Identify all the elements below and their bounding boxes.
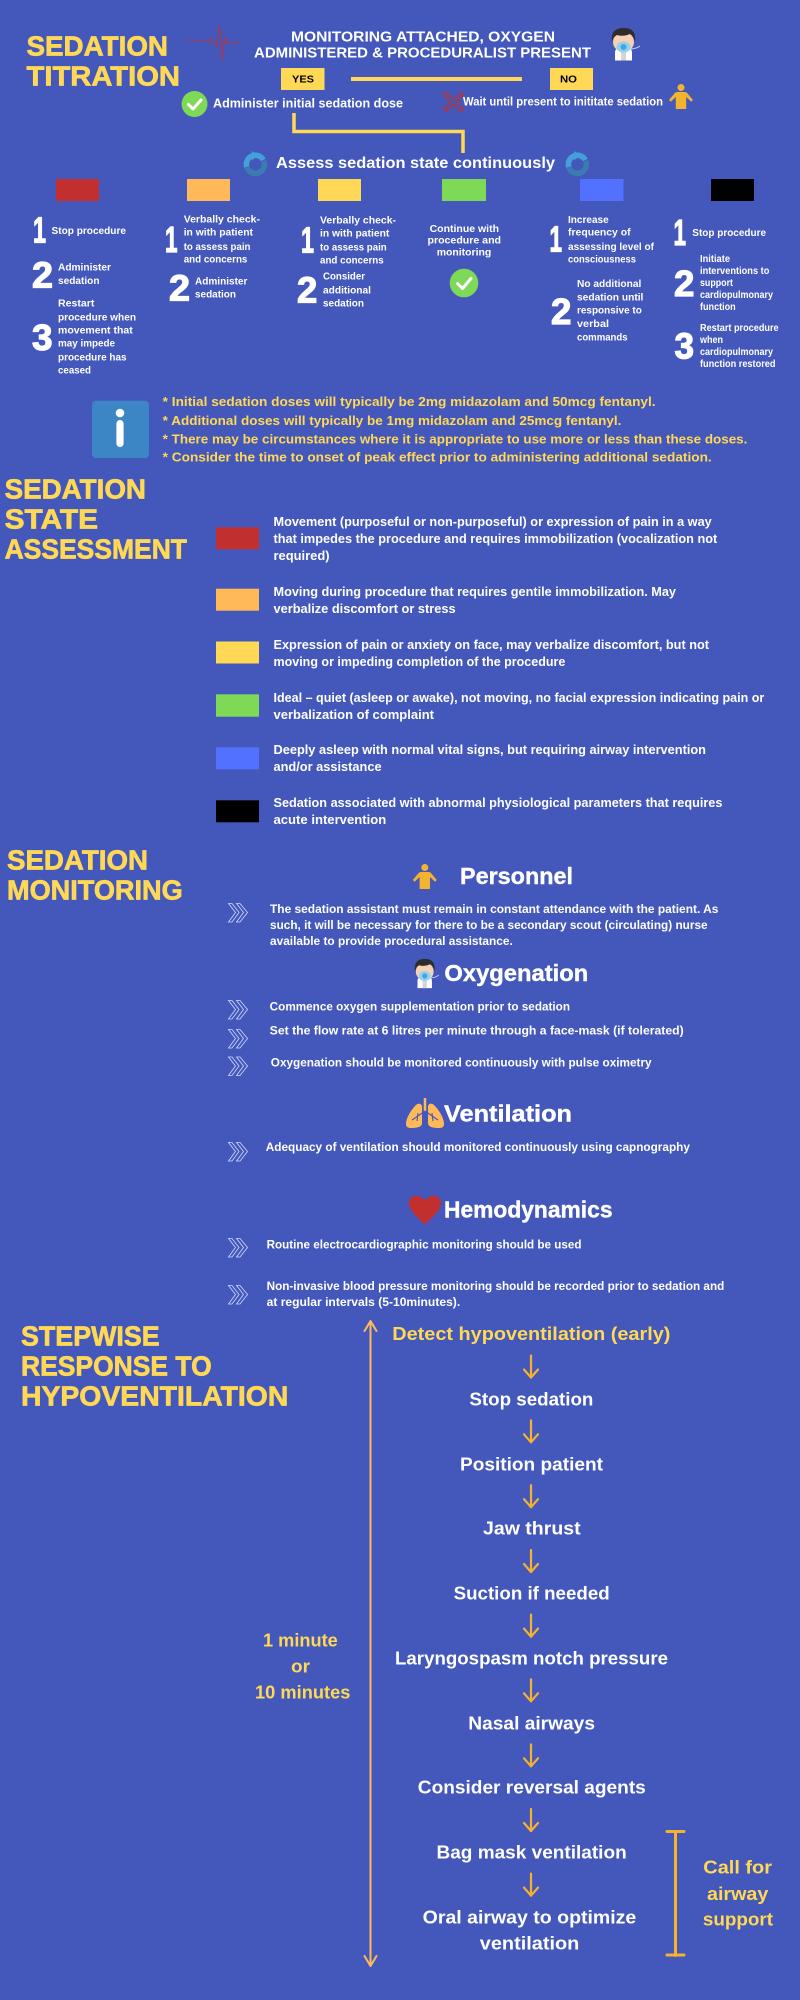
column: green: Continue with (430, 223, 499, 235)
connector: yes to no (351, 77, 522, 81)
column: orange: 1 (165, 219, 178, 260)
column: orange: 2 (169, 268, 190, 309)
state: green: Ideal – quiet (asleep or awake), not moving, no facial expression indicating pain or (274, 691, 764, 705)
step: reversal agents: Consider reversal agents (418, 1778, 646, 1798)
column: blue: frequency of (568, 227, 631, 239)
column: black (674, 179, 779, 370)
column: blue: verbal (577, 318, 609, 330)
icon: green check (182, 91, 208, 117)
text: wait until present: Wait until present to inititate sedation (463, 96, 663, 108)
column: red: Administer (58, 262, 111, 274)
column: yellow: Verbally check- (320, 214, 396, 226)
column: blue: assessing level of (568, 241, 654, 253)
text: administer initial dose: Administer initial sedation dose (213, 96, 403, 110)
heading: sedation monitoring: MONITORING (7, 874, 183, 905)
column: yellow: in with patient (320, 228, 390, 240)
column: red: sedation (58, 275, 100, 287)
arrow (524, 1550, 538, 1572)
column: blue: 2 (551, 291, 571, 332)
hemodynamics block: at regular intervals (5-10minutes). (267, 1297, 460, 1309)
column: black: support (700, 277, 733, 289)
column: black: Restart procedure (700, 322, 779, 334)
column: yellow: to assess pain (320, 242, 387, 254)
arrow (524, 1485, 538, 1507)
step: bag mask: Bag mask ventilation (436, 1843, 627, 1863)
heading: stepwise response (21, 1321, 288, 1412)
text: assess sedation state: Assess sedation state continuously (276, 155, 555, 172)
hemodynamics block (228, 1196, 724, 1309)
notes: doses: * Consider the time to onset of peak effect prior to administering additional sedation. (163, 449, 712, 464)
personnel block: such, it will be necessary for there to be a secondary scout (circulating) nurse (270, 920, 708, 932)
heading: stepwise response: STEPWISE (21, 1321, 160, 1352)
step: suction: Suction if needed (454, 1583, 610, 1603)
state: black: Sedation associated with abnormal physiological parameters that requires (274, 796, 722, 810)
label: time: 1 minute (263, 1631, 338, 1651)
column: green: procedure and (428, 234, 501, 246)
state: yellow (216, 638, 710, 669)
yes box: YES (292, 74, 314, 86)
question: monitoring attached: ADMINISTERED & PROCEDURALIST PRESENT (254, 45, 591, 61)
icon: doctor with mask (612, 28, 640, 60)
column: red: procedure has (58, 352, 127, 364)
arrow (524, 1874, 538, 1896)
heading: stepwise response: RESPONSE TO (21, 1351, 212, 1382)
state: orange (216, 585, 676, 616)
column: red: movement that (58, 325, 133, 337)
column: green: monitoring (437, 246, 491, 258)
arrow (524, 1420, 538, 1442)
label: call for airway support: airway (707, 1884, 768, 1904)
hemodynamics block: Hemodynamics (444, 1197, 612, 1223)
column: orange: sedation (195, 289, 236, 301)
column: orange: in with patient (184, 227, 253, 239)
state: green (216, 691, 764, 722)
state: red: that impedes the procedure and requires immobilization (vocalization not (274, 532, 718, 546)
state: yellow: Expression of pain or anxiety on face, may verbalize discomfort, but not (274, 638, 710, 652)
column: yellow: sedation (323, 298, 364, 310)
column: yellow: 1 (301, 220, 314, 261)
column: black: function (700, 301, 736, 313)
heading: sedation titration (26, 31, 180, 92)
step: nasal airways: Nasal airways (468, 1714, 595, 1734)
column: yellow (297, 179, 396, 311)
column: orange (165, 179, 260, 309)
column: blue: Increase (568, 214, 609, 226)
column: black: when (699, 334, 723, 346)
section: sedation state assessment (5, 473, 764, 827)
column: yellow: Consider (323, 271, 365, 283)
question: monitoring attached: MONITORING ATTACHED, OXYGEN (291, 30, 555, 46)
arrow (524, 1615, 538, 1637)
column: black: cardiopulmonary (700, 289, 773, 301)
section: sedation titration (26, 26, 779, 464)
column: blue: No additional (577, 278, 641, 290)
label: time (255, 1631, 350, 1703)
state: green: verbalization of complaint (274, 708, 435, 722)
oxygenation block: Set the flow rate at 6 litres per minute through a face-mask (if tolerated) (270, 1026, 684, 1038)
oxygenation block: Commence oxygen supplementation prior to sedation (270, 1002, 570, 1014)
arrow (524, 1744, 538, 1766)
heading: sedation state assessment: ASSESSMENT (5, 533, 187, 564)
personnel block: The sedation assistant must remain in constant attendance with the patient. As (270, 904, 718, 916)
label: time: or (291, 1656, 310, 1676)
arrow (524, 1679, 538, 1701)
step: laryngospasm notch: Laryngospasm notch pressure (395, 1649, 668, 1669)
state: blue: and/or assistance (274, 760, 382, 774)
column: yellow: 2 (297, 270, 317, 311)
column: black: function restored (700, 358, 776, 370)
step: position patient: Position patient (460, 1455, 603, 1475)
connector: dose to assess (294, 113, 463, 153)
column: blue: consciousness (568, 254, 636, 266)
column: blue: commands (577, 332, 628, 344)
personnel block (228, 863, 718, 948)
step: oral airway (423, 1908, 636, 1954)
state: black (216, 796, 722, 827)
column: red: Restart (58, 298, 95, 310)
state: blue (216, 743, 706, 774)
label: call for airway support: Call for (703, 1858, 772, 1878)
state: blue: Deeply asleep with normal vital signs, but requiring airway intervention (274, 743, 706, 757)
icon: heart (409, 1196, 441, 1225)
state: yellow: moving or impeding completion of the procedure (274, 655, 565, 669)
heading: sedation state assessment (5, 473, 187, 564)
oxygenation block (228, 959, 684, 1076)
yes box (281, 68, 324, 90)
column: red: 3 (32, 317, 52, 358)
column: blue: 1 (550, 219, 562, 260)
column: red (32, 179, 136, 377)
column: red: 1 (33, 210, 46, 251)
icon: person (669, 84, 693, 109)
heading: sedation titration: TITRATION (26, 61, 180, 92)
step: detect hypoventilation: Detect hypoventilation (early) (392, 1324, 670, 1344)
personnel block: Personnel (460, 863, 573, 889)
column: black: Stop procedure (692, 227, 766, 239)
column: orange: Administer (195, 276, 247, 288)
heading: sedation state assessment: SEDATION (5, 473, 146, 504)
column: red: may impede (58, 338, 115, 350)
label: time: 10 minutes (255, 1683, 350, 1703)
column: blue: sedation until (577, 292, 643, 304)
icon: loop right (568, 151, 586, 173)
column: orange: and concerns (184, 254, 248, 266)
column: red: ceased (58, 365, 91, 377)
notes: doses: * There may be circumstances where it is appropriate to use more or less than these doses. (163, 431, 747, 446)
heading: sedation state assessment: STATE (5, 503, 98, 534)
heading: sedation titration: SEDATION (26, 31, 168, 62)
ventilation block: Ventilation (444, 1101, 572, 1127)
bracket: airway support (667, 1832, 684, 1956)
column: red: 2 (32, 254, 53, 295)
oxygenation block: Oxygenation should be monitored continuously with pulse oximetry (271, 1058, 652, 1070)
notes: doses: * Additional doses will typically be 1mg midazolam and 25mcg fentanyl. (163, 413, 621, 428)
column: yellow: and concerns (320, 255, 384, 267)
ventilation block (228, 1098, 691, 1161)
column: yellow: additional (323, 285, 371, 297)
arrow: time axis (364, 1321, 376, 1966)
hemodynamics block: Non-invasive blood pressure monitoring should be recorded prior to sedation and (267, 1281, 724, 1293)
arrow (524, 1356, 538, 1378)
label: call for airway support: support (703, 1910, 773, 1930)
personnel block: available to provide procedural assistance. (270, 936, 513, 948)
no box: NO (560, 74, 577, 86)
notes: doses: * Initial sedation doses will typically be 2mg midazolam and 50mcg fentanyl. (163, 394, 656, 409)
column: red: procedure when (58, 312, 136, 324)
column: black: cardiopulmonary (700, 346, 773, 358)
notes: doses (163, 394, 747, 464)
column: black: 1 (674, 212, 686, 253)
section: sedation monitoring (7, 844, 724, 1309)
step: oral airway: ventilation (480, 1934, 579, 1954)
ventilation block: Adequacy of ventilation should monitored continuously using capnography (266, 1142, 691, 1154)
state: red: required) (274, 549, 330, 563)
step: jaw thrust: Jaw thrust (483, 1519, 581, 1539)
no box (550, 68, 593, 90)
column: orange: to assess pain (184, 241, 250, 253)
state: red (216, 515, 718, 563)
column: black: 2 (674, 263, 694, 304)
state: orange: Moving during procedure that requires gentile immobilization. May (274, 585, 676, 599)
column: black: interventions to (700, 265, 769, 277)
icon: heartbeat pulse (186, 26, 240, 60)
heading: stepwise response: HYPOVENTILATION (21, 1381, 288, 1412)
column: black: Initiate (700, 253, 730, 265)
oxygenation block: Oxygenation (444, 960, 588, 986)
question: monitoring attached (254, 30, 591, 61)
heading: sedation monitoring: SEDATION (7, 844, 148, 875)
step: oral airway: Oral airway to optimize (423, 1908, 636, 1928)
state: orange: verbalize discomfort or stress (274, 602, 456, 616)
column: black: 3 (674, 326, 694, 367)
section: stepwise response (21, 1321, 773, 1966)
column: red: Stop procedure (52, 225, 126, 237)
heading: sedation monitoring (7, 844, 183, 905)
column: blue (550, 179, 654, 344)
step: stop sedation: Stop sedation (469, 1390, 593, 1410)
column: orange: Verbally check- (184, 214, 260, 226)
state: red: Movement (purposeful or non-purposeful) or expression of pain in a way (274, 515, 712, 529)
hemodynamics block: Routine electrocardiographic monitoring should be used (267, 1240, 582, 1252)
arrow (524, 1809, 538, 1831)
column: green (428, 179, 501, 297)
icon: info (92, 401, 149, 458)
state: black: acute intervention (274, 813, 386, 827)
label: call for airway support (703, 1858, 773, 1930)
icon: lungs (406, 1098, 444, 1128)
column: blue: responsive to (577, 305, 642, 317)
icon: red cross (446, 95, 461, 109)
icon: loop left (246, 151, 264, 173)
